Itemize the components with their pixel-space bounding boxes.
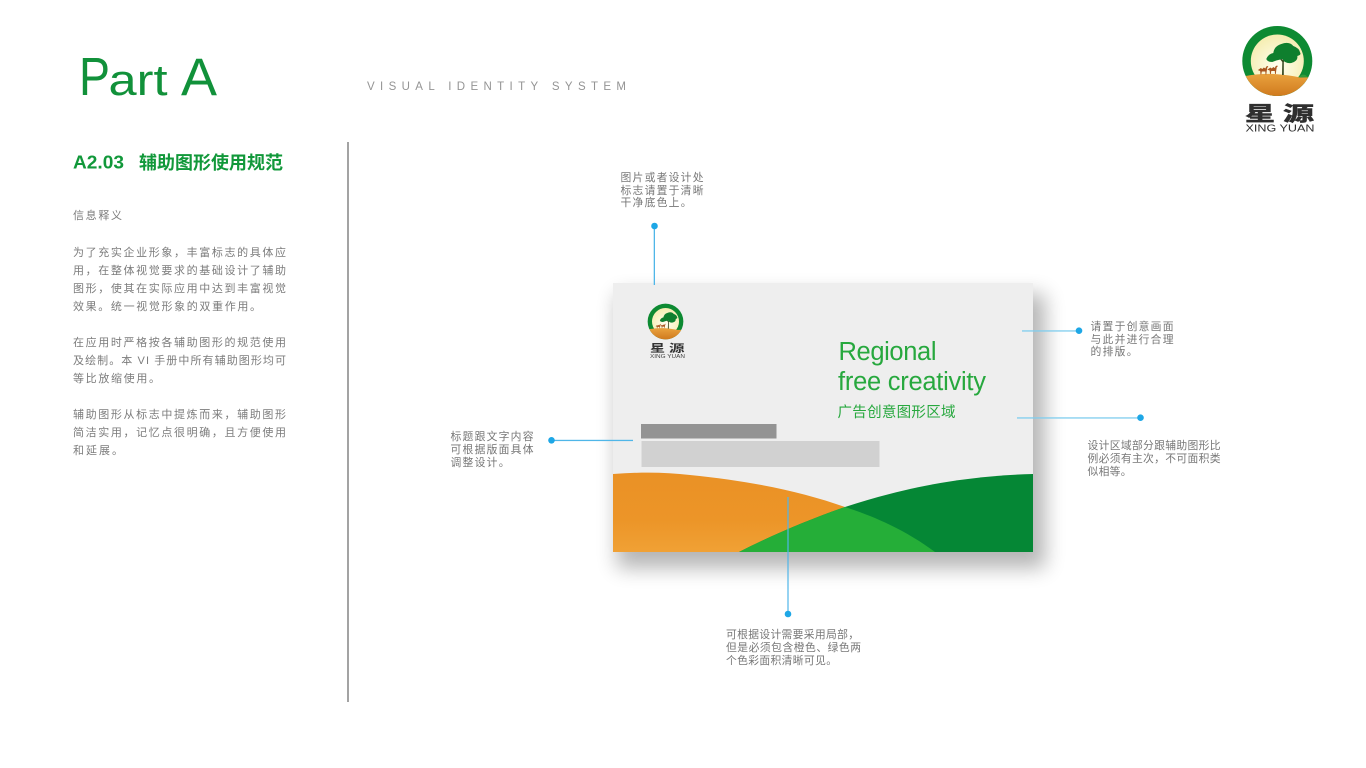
text block: description: 为了充实企业形象，丰富标志的具体应 bbox=[73, 245, 286, 259]
text block: description: 简洁实用，记忆点很明确，且方便使用 bbox=[73, 425, 286, 439]
logo latin name: XING YUAN bbox=[1246, 124, 1314, 134]
text block: description: 辅助图形从标志中提炼而来，辅助图形 bbox=[73, 407, 286, 421]
callout: top: 标志请置于清晰 bbox=[620, 183, 704, 197]
logo wordmark bbox=[1245, 102, 1314, 126]
text block: description: 在应用时严格按各辅助图形的规范使用 bbox=[73, 335, 286, 349]
card heading: free creativity bbox=[838, 368, 986, 396]
text block: description: 和延展。 bbox=[73, 444, 123, 457]
small emblem bbox=[648, 304, 683, 339]
small wordmark: 星 bbox=[650, 342, 665, 354]
callout: right lower: 设计区域部分跟辅助图形比 bbox=[1088, 438, 1221, 452]
callout: right upper: 的排版。 bbox=[1090, 344, 1138, 358]
callout: bottom: 个色彩面积清晰可见。 bbox=[726, 653, 837, 667]
callout: top bbox=[620, 171, 704, 285]
title: P bbox=[79, 47, 110, 107]
callout: right upper: 与此并进行合理 bbox=[1090, 332, 1174, 346]
title placeholder bbox=[641, 424, 776, 438]
supporting graphic: hills bbox=[613, 473, 1033, 552]
logo wordmark: 星 bbox=[1245, 104, 1275, 126]
card shadow bbox=[617, 294, 1045, 568]
callout: right lower: 似相等。 bbox=[1088, 464, 1132, 478]
section heading bbox=[73, 152, 283, 173]
card heading: Regional bbox=[838, 338, 936, 366]
logo emblem bbox=[1242, 26, 1312, 96]
body placeholder bbox=[642, 441, 880, 467]
callout: left: 调整设计。 bbox=[450, 455, 510, 469]
callout: right upper bbox=[1022, 319, 1174, 358]
callout: left bbox=[450, 429, 633, 469]
subtitle: VISUAL IDENTITY SYSTEM bbox=[367, 81, 626, 93]
small latin name: XING YUAN bbox=[650, 354, 685, 360]
title: A bbox=[181, 48, 218, 107]
logo wordmark: 源 bbox=[1283, 102, 1314, 126]
small wordmark: 源 bbox=[669, 342, 685, 354]
callout: right upper: 请置于创意画面 bbox=[1090, 319, 1174, 333]
panel: sample layout card bbox=[613, 283, 1045, 568]
small wordmark bbox=[650, 342, 685, 354]
text block: description bbox=[73, 208, 286, 457]
callout: bottom bbox=[726, 497, 861, 667]
callout: left: 可根据版面具体 bbox=[450, 442, 534, 456]
text block: description: 等比放缩使用。 bbox=[73, 371, 160, 385]
callout: left: 标题跟文字内容 bbox=[450, 429, 534, 443]
text block: description: 效果。统一视觉形象的双重作用。 bbox=[73, 299, 261, 313]
card background bbox=[613, 283, 1033, 552]
text block: description: 图形，使其在实际应用中达到丰富视觉 bbox=[73, 281, 286, 295]
callout: right lower bbox=[1017, 414, 1221, 478]
callout: bottom: 但是必须包含橙色、绿色两 bbox=[726, 640, 861, 654]
section heading: 辅助图形使用规范 bbox=[139, 153, 283, 173]
card heading: 广告创意图形区域 bbox=[838, 403, 956, 421]
callout: right lower: 例必须有主次，不可面积类 bbox=[1088, 451, 1221, 465]
callout: bottom: 可根据设计需要采用局部， bbox=[726, 627, 859, 641]
text block: description: 信息释义 bbox=[73, 208, 122, 222]
callout: top: 图片或者设计处 bbox=[620, 171, 704, 184]
callout: top: 干净底色上。 bbox=[620, 195, 692, 209]
card heading bbox=[838, 338, 986, 421]
title: art bbox=[108, 56, 168, 105]
text block: description: 及绘制。本 VI 手册中所有辅助图形均可 bbox=[73, 353, 286, 367]
logo: top right bbox=[1242, 26, 1314, 134]
title bbox=[79, 47, 218, 107]
text block: description: 用，在整体视觉要求的基础设计了辅助 bbox=[73, 263, 286, 277]
section heading: A2.03 bbox=[73, 152, 124, 172]
logo: on card bbox=[648, 304, 685, 360]
